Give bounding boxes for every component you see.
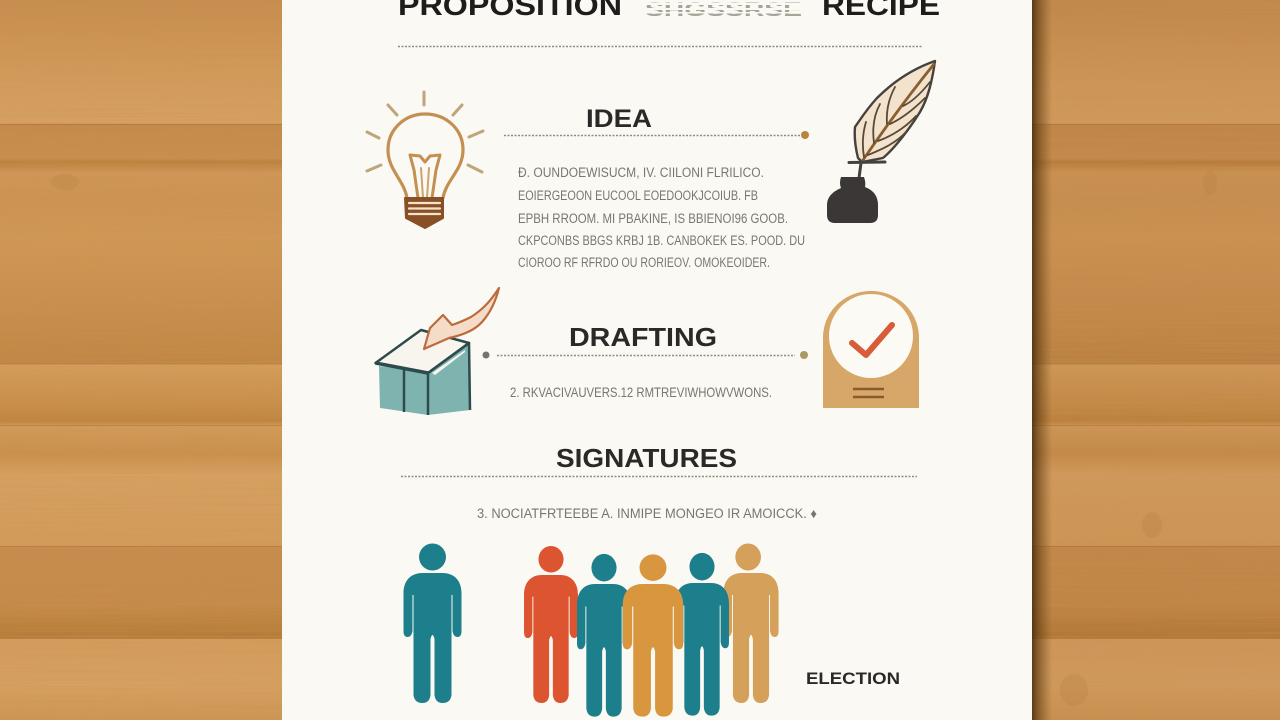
text block: drafting: 2. RKVACIVAUVERS.12 RMTREVIWHOWVWONS. xyxy=(510,384,772,400)
icon: light bulb xyxy=(367,92,483,228)
person: red xyxy=(524,546,578,703)
title xyxy=(398,0,940,22)
paper shadow xyxy=(1032,0,1052,720)
person: tan back xyxy=(723,544,779,703)
icon: check badge xyxy=(823,291,919,408)
icon: quill and ink bottle xyxy=(827,61,935,223)
divider: drafting xyxy=(482,351,808,359)
heading: signatures: SIGNATURES xyxy=(556,443,737,473)
text block: idea xyxy=(518,165,805,270)
text block: idea: CKPCONBS BBGS KRBJ 1B. CANBOKEK ES. POOD. DU xyxy=(518,233,805,248)
person: orange xyxy=(623,554,683,717)
title: SHGSSRSE xyxy=(645,0,802,21)
label: election: ELECTION xyxy=(806,669,900,688)
person: teal solo xyxy=(404,544,462,703)
people group xyxy=(404,544,779,717)
text block: idea: EOIERGEOON EUCOOL EOEDOOKJCOIUB. FB xyxy=(518,188,758,203)
divider: idea xyxy=(504,131,809,139)
paper sheet xyxy=(282,0,1032,720)
person: teal second xyxy=(577,554,631,717)
heading: idea: IDEA xyxy=(586,105,652,133)
heading: drafting: DRAFTING xyxy=(569,322,717,352)
text block: idea: CIOROO RF RFRDO OU RORIEOV. OMOKEOIDER. xyxy=(518,255,770,270)
text block: idea: Ð. OUNDOEWISUCM, IV. CIILONI FLRILICO. xyxy=(518,165,764,180)
text block: signatures: 3. NOCIATFRTEEBE A. INMIPE MONGEO IR AMOICCK. ♦ xyxy=(477,506,817,521)
text block: idea: EPBH RROOM. MI PBAKINE, IS BBIENOI96 GOOB. xyxy=(518,211,788,226)
icon: ballot box xyxy=(376,288,499,415)
person: teal third xyxy=(675,553,729,716)
